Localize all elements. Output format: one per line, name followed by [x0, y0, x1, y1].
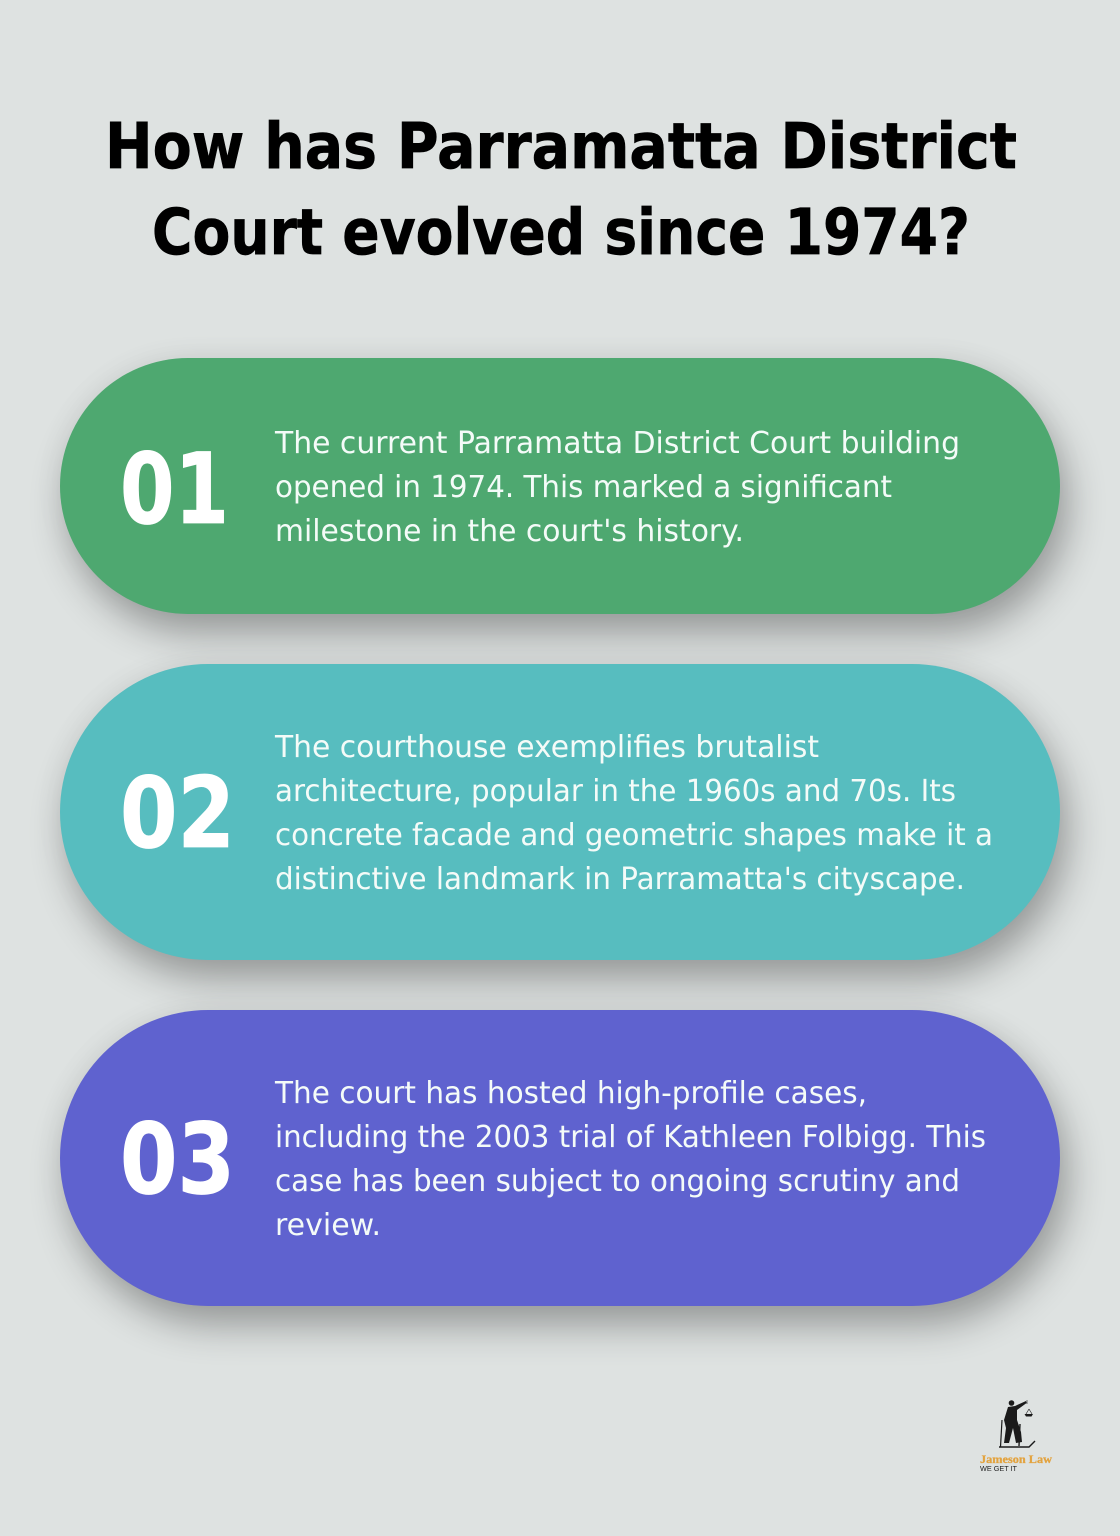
step 02 text: architecture, popular in the 1960s and 70s. Its: [275, 774, 956, 809]
step number 01: 01: [120, 433, 229, 547]
step number 03: 03: [120, 1103, 235, 1217]
title: Court evolved since 1974?: [152, 196, 970, 269]
panel: step 02: [60, 664, 1060, 960]
step 02 text: [274, 730, 993, 897]
title: How has Parramatta District: [105, 110, 1017, 183]
step 02 text: concrete facade and geometric shapes make it a: [275, 818, 993, 853]
step 03 text: including the 2003 trial of Kathleen Folbigg. This: [275, 1120, 986, 1155]
icon: lady justice with scales: [999, 1400, 1035, 1447]
panel: step 03: [60, 1010, 1060, 1306]
step 03 text: case has been subject to ongoing scrutiny and: [275, 1164, 960, 1199]
step 03 text: [274, 1076, 986, 1243]
logo name: Jameson Law: [980, 1454, 1053, 1466]
step 01 text: milestone in the court's history.: [275, 514, 744, 549]
step 01 text: [274, 426, 960, 549]
step 03 text: The court has hosted high-profile cases,: [274, 1076, 867, 1111]
title: [105, 110, 1017, 269]
step number 02: 02: [120, 757, 235, 871]
step 01 text: opened in 1974. This marked a significant: [275, 470, 892, 505]
step 03 text: review.: [275, 1208, 381, 1243]
step 02 text: distinctive landmark in Parramatta's cityscape.: [275, 862, 965, 897]
logo tagline: WE GET IT: [980, 1464, 1017, 1473]
step 02 text: The courthouse exemplifies brutalist: [274, 730, 819, 765]
step 01 text: The current Parramatta District Court building: [274, 426, 960, 461]
panel: step 01: [60, 358, 1060, 614]
